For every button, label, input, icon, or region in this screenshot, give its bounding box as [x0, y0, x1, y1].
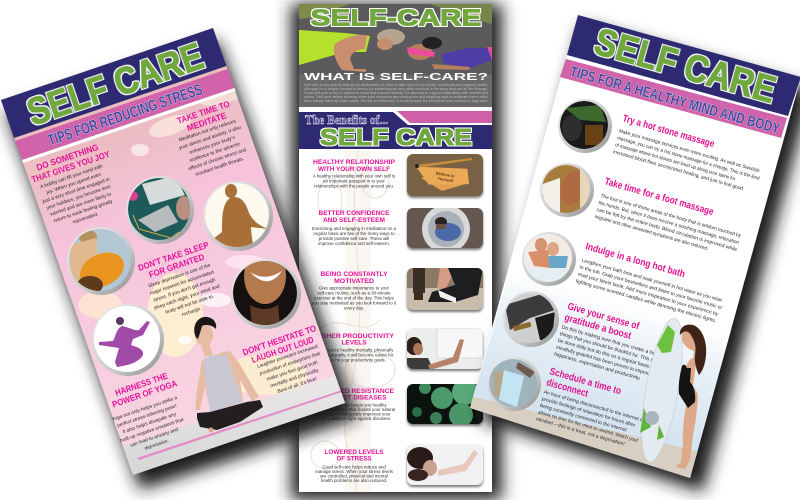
panel: right poster healthy mind and body	[470, 15, 800, 492]
text block: do something	[36, 163, 120, 233]
tip: foot massage: migraine and other unwanted symptoms are also reduced.	[594, 214, 709, 252]
banner: benefits of self care: SELF CARE	[320, 124, 472, 150]
benefit: healthy relationship: HEALTHY RELATIONSHIP	[313, 159, 395, 166]
text block: yoga: perfect stress-relieving pose!	[116, 403, 178, 429]
text block: yoga: built-up negative emotions that	[119, 417, 185, 444]
banner: benefits of self care: The Benefits of...	[305, 112, 388, 127]
icon: foot massage circle	[540, 163, 594, 217]
tip: gratitude: gratitude a boost	[563, 312, 633, 342]
text block: yoga	[111, 395, 191, 459]
benefit: lowered stress: LOWERED LEVELS	[324, 449, 384, 456]
tip: laugh	[241, 323, 321, 367]
benefit: lowered stress	[315, 449, 394, 483]
photo: believe in yourself note	[407, 154, 483, 198]
benefit: lowered stress: OF STRESS	[336, 456, 372, 462]
benefit: better confidence: AND SELF-ESTEEM	[323, 217, 385, 224]
heading: what is self-care: WHAT IS SELF-CARE?	[304, 72, 488, 83]
text block: do something: A hobby can fill your mind with	[39, 163, 104, 190]
benefit: healthy relationship: WITH YOUR OWN SELF	[318, 166, 390, 173]
icon: meditation silhouette circle	[203, 181, 273, 251]
tip: foot massage: the hands. But, when it does receive a soothing massage, relaxation	[598, 200, 740, 246]
benefit: lowered stress: manage stress. When your stress levels	[315, 469, 394, 474]
yoga mat	[137, 389, 345, 460]
text block: sleep: Sleep deprivation is one of the	[147, 262, 212, 289]
photo: relaxed woman	[407, 444, 483, 487]
tip: hot stone massage	[612, 113, 767, 196]
tip: gratitude: be done daily but do this on a regular basis. Being	[557, 338, 665, 374]
tip: disconnect: allows no time for the mind to unwind. Watch your	[537, 410, 639, 444]
illustration: woman in yoga pose	[194, 317, 263, 432]
text block: do something: joy. When you spend even	[45, 172, 102, 196]
tip: sleep	[137, 240, 213, 282]
text block: laugh: Laughter promotes increased	[256, 344, 319, 370]
subtitle: TIPS FOR REDUCING STRESS	[46, 81, 205, 150]
benefit: healthy relationship: relationships with the people around you.	[314, 184, 394, 188]
benefit: being constantly motivated: self-care routine, such as a 30-minute	[317, 290, 391, 296]
text block: yoga: Yoga not only helps you strike a	[111, 395, 178, 423]
tip: foot massage: Take time for a foot massage	[603, 176, 715, 218]
banner: benefits of self care	[299, 111, 492, 150]
tip: disconnect: disconnect	[545, 377, 590, 400]
text block: do something: rejuvenated.	[72, 211, 99, 226]
text block: do something: worried and are more likely to	[50, 191, 113, 218]
tip: gratitude: Give your sense of	[566, 301, 641, 332]
tip: hot stone massage: Make your massage services even more exciting. As well as Swedish	[618, 128, 761, 174]
text block: meditate: Meditation not only reduces	[178, 118, 237, 143]
text block: yoga: can lead to anxiety and	[130, 427, 179, 449]
benefit: lowered stress: health problems are also reduced.	[321, 478, 387, 483]
benefit: being constantly motivated: BEING CONSTANTLY	[320, 271, 388, 278]
photo: green viruses	[407, 379, 483, 427]
tip: do something: THAT GIVES YOU JOY	[30, 149, 111, 185]
tip: disconnect: mindset – this is a treat, not a deprivation!	[535, 416, 625, 447]
benefit: lowered stress: Good self-care helps reduce and	[322, 464, 386, 470]
benefit: better confidence: Exercising and engaging in meditation on a	[312, 226, 397, 231]
tip: do something: DO SOMETHING	[35, 142, 100, 172]
text block: meditate: resilience to the adverse	[189, 141, 241, 164]
icon: hot bath circle	[522, 232, 576, 286]
intro text: others. Self-care means knowing when your resources are running low and stepping back to replenish them rather	[304, 95, 489, 99]
intro text	[304, 83, 489, 103]
icon: guitar circle	[67, 227, 135, 295]
benefit: improved resistance: mentally and diet. This boosts your natural	[313, 407, 395, 412]
benefit: improved resistance	[313, 388, 395, 421]
text block: meditate: resultant health threats.	[195, 156, 245, 178]
benefit: higher productivity: LEVELS	[342, 340, 366, 346]
benefit: lowered stress: are controlled, physical and mental	[320, 474, 388, 478]
text block: meditate: enhances your body's	[189, 135, 236, 156]
text block: laugh: Best of all, it's free!	[277, 376, 318, 395]
tip: hot stone massage: of massage where hot stones are lined up along your spine for	[614, 142, 736, 182]
text block: sleep: stress. If you don't get enough	[153, 277, 217, 304]
text block: meditate: your stress and anxiety, it also	[178, 125, 242, 151]
tip: yoga: HARNESS THE	[114, 371, 169, 398]
photo: what is self-care	[299, 4, 492, 107]
header band	[1, 28, 226, 138]
panel: centre poster	[291, 4, 502, 500]
benefit: improved resistance: AGAINST DISEASES	[322, 394, 386, 402]
benefit: higher productivity	[314, 333, 395, 362]
benefit: being constantly motivated	[312, 271, 397, 310]
heading: self-care: SELF-CARE	[310, 4, 482, 30]
benefit: healthy relationship: A healthy relationship with your own self is	[313, 174, 396, 178]
text block: sleep: body will not be able to	[165, 294, 214, 316]
benefit: higher productivity: you to hit your productivity goals.	[322, 358, 386, 362]
icon: yoga colour silhouette circle	[92, 304, 164, 376]
text block: yoga: It also helps dissipate any	[122, 411, 177, 435]
icon: thank-you note circle	[487, 357, 541, 411]
text block: yoga: depression.	[144, 438, 170, 452]
tip: hot bath: read your latest book. Add more inspiration to your experience by	[577, 271, 719, 318]
tip: foot massage	[594, 176, 747, 260]
tip: laugh: DON'T HESITATE TO	[241, 323, 318, 357]
tip: disconnect: Being constantly connected to the internet	[539, 403, 628, 434]
tip: gratitude: Do this by making sure that you create a list of	[561, 324, 662, 359]
tip: hot bath: lighting some scented candles while dimming the electric lights.	[575, 278, 717, 324]
benefit: improved resistance: body's ability to fight against diseases.	[317, 416, 391, 421]
icon: cards circle	[126, 176, 194, 244]
tip: gratitude: mindfully grateful has been proven to improve	[555, 345, 653, 378]
text block: laugh: mentally and physically.	[270, 367, 320, 389]
icon: smile circle	[231, 259, 301, 329]
title: SELF CARE	[22, 36, 209, 134]
text block: sleep	[146, 262, 226, 326]
text block: meditate	[176, 117, 252, 180]
tip: gratitude: happiness, expectation and productivity.	[553, 351, 641, 382]
photo: believe in yourself note: Believe in	[436, 170, 455, 179]
intro text: Self-care is any activity that we do deliberately in order to take care of our mental, emotional and physical health.	[304, 83, 488, 87]
text block: sleep: recharge.	[181, 306, 203, 318]
tip: hot bath: Lengthen your bath time and soak yourself in hot water as you relax	[581, 258, 723, 304]
tip: foot massage: The foot is one of those areas of the body that is seldom touched by	[600, 193, 742, 239]
benefit: better confidence: BETTER CONFIDENCE	[318, 210, 390, 217]
benefit: being constantly motivated: every day.	[344, 306, 364, 310]
benefit: improved resistance: IMPROVED RESISTANCE	[314, 388, 394, 395]
faint floral background	[311, 150, 395, 492]
text block: sleep: major reasons for accumulated	[149, 269, 215, 297]
text block: do something: just a very short time engaged in	[41, 176, 111, 205]
benefit: better confidence	[312, 210, 397, 246]
text block: do something: your hobbies, you become less	[46, 184, 112, 211]
tip: hot bath: in the tub. Grab your bestsellers and listen to your favorite music or	[579, 265, 723, 311]
benefit: higher productivity: When you're healthy mentally, physically	[315, 348, 394, 352]
tip: hot bath	[575, 241, 730, 325]
tip: meditate	[176, 99, 234, 135]
tip: sleep: DON'T TAKE SLEEP	[137, 240, 210, 273]
photo: man writing on whiteboard	[406, 328, 483, 371]
benefit: better confidence: provide positive self-care. These will	[319, 236, 389, 241]
benefit: improved resistance: Good self-care keeps you healthy	[321, 402, 388, 408]
tip: sleep: FOR GRANTED	[148, 252, 206, 280]
text block: meditate: effects of chronic stress and	[188, 147, 247, 172]
tip: disconnect: provide feelings of relaxation for hours after.	[541, 396, 637, 429]
tip: meditate: MEDITATE	[186, 110, 228, 133]
benefit: improved resistance: immunity which greatly improves your	[317, 412, 391, 416]
text block: laugh	[256, 343, 329, 399]
benefit: healthy relationship	[313, 159, 396, 188]
pink background bokeh	[15, 68, 345, 475]
tip: laugh: LAUGH OUT LOUD	[250, 335, 315, 365]
benefit: better confidence: regular basis are two of the many ways to	[313, 231, 395, 236]
tip: hot stone massage: increased blood flow, accelerated healing, and just to feel good	[612, 149, 744, 192]
benefit: healthy relationship: an important passport in to your	[323, 178, 385, 184]
text block: do something: return to work feeling greatly	[53, 199, 114, 224]
tip: gratitude	[553, 301, 677, 388]
benefit: higher productivity: HIGHER PRODUCTIVITY	[314, 333, 395, 340]
tip: disconnect	[535, 366, 655, 452]
benefit: being constantly motivated: you stay motivated as you look forward to it	[312, 300, 397, 306]
intro text: Although it's a simple concept in theory, it's something we very often overlook in the busy days we all live through.	[304, 87, 488, 91]
photo: believe in yourself note: Yourself	[437, 176, 454, 183]
panel: left poster tips for reducing stress	[1, 28, 358, 490]
intro text: Good self-care is key to improved mood and reduced anxiety. It's also key to a good relationship with oneself and	[304, 91, 488, 95]
text block: sleep: sleep each night, your mind and	[153, 283, 221, 312]
tip: hot stone massage: massage, you can try a hot stone massage for a change. This is the kind	[616, 135, 760, 182]
intro text: than letting them all drain away. It's not a selfish act; it is necessary for everyone who wishes to stay well.	[304, 99, 488, 103]
text block: laugh: make you feel good both	[266, 360, 319, 383]
benefit: better confidence: improve confidence and self-esteem.	[318, 241, 390, 246]
tip: meditate: TAKE TIME TO	[176, 99, 231, 126]
text block: laugh: production of endorphins that	[259, 351, 321, 377]
tip: disconnect: Schedule a time to	[548, 366, 622, 397]
tip: yoga: POWER OF YOGA	[111, 378, 179, 409]
benefit: being constantly motivated: MOTIVATED	[334, 278, 375, 285]
photo: mirror portrait	[407, 205, 483, 253]
floor	[120, 372, 345, 475]
sky and beach background	[470, 285, 731, 478]
tip: hot bath: Indulge in a long hot bath	[584, 241, 686, 280]
photo: dancers	[407, 268, 483, 312]
benefit: being constantly motivated: exercise at the end of the day. This helps	[314, 296, 395, 300]
tip: gratitude: things that you should be thankful for. This may not	[559, 331, 669, 368]
illustration: surfer with board	[634, 315, 706, 469]
tip: hot stone massage: Try a hot stone massage	[621, 113, 716, 150]
icon: hot stones circle	[558, 99, 612, 153]
tip: foot massage: can be felt by the entire body. Blood circulation is improved while	[596, 207, 738, 253]
header band	[567, 15, 800, 116]
icon: machine circle	[503, 291, 559, 347]
tip: disconnect: An hour of being disconnected to the internet can	[543, 389, 649, 425]
benefit: being constantly motivated: Give appropriate importance to your	[319, 286, 390, 290]
benefit: higher productivity: and emotionally, it will become easier for	[315, 352, 394, 358]
